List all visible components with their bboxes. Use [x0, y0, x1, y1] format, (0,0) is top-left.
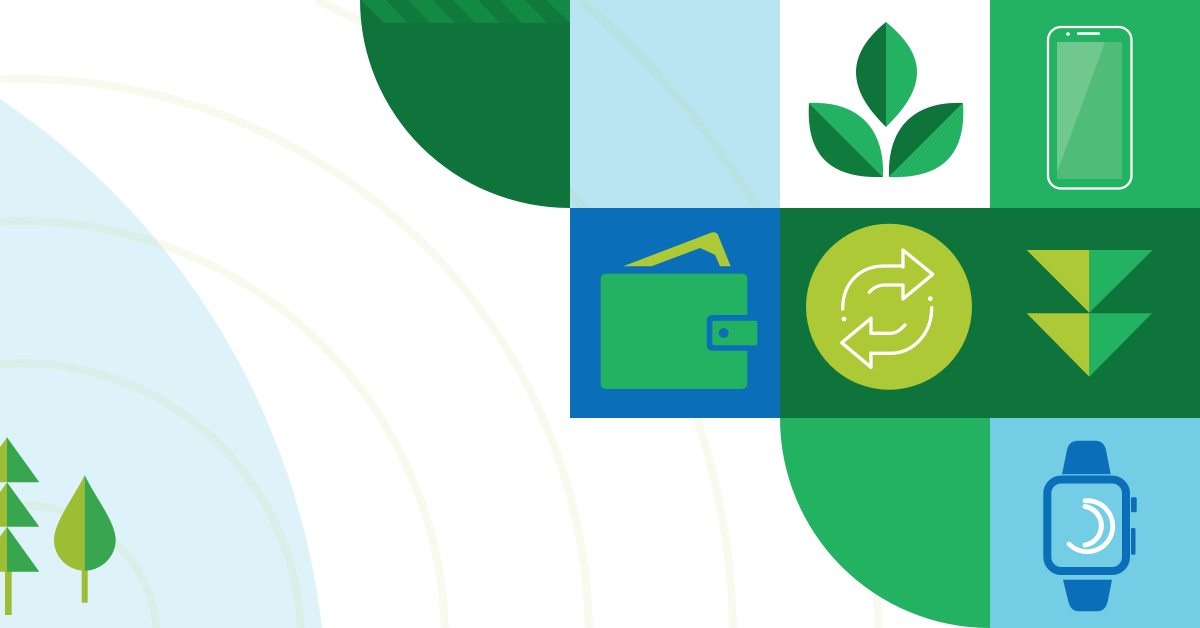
- panel: dark green quarter circle: [360, 0, 570, 208]
- panel: green phone cell: [990, 0, 1200, 208]
- striped band: [361, 0, 570, 23]
- panel: blue wallet cell: [570, 208, 780, 418]
- panel: dark green band: [780, 208, 1200, 418]
- icon: three leaves: [809, 22, 963, 177]
- icon: stacked triangles: [1027, 250, 1153, 377]
- panel: sky blue watch cell: [990, 418, 1200, 628]
- icon: lime circle with recycle arrows: [806, 224, 972, 390]
- panel: white leaf cell: [780, 0, 990, 208]
- icon: pine tree: [0, 437, 39, 615]
- icon: round tree: [54, 475, 116, 603]
- panel: green quarter circle: [780, 418, 990, 628]
- icon: smartphone: [1048, 27, 1132, 188]
- icon: wallet: [601, 232, 757, 389]
- panel: light blue square: [570, 0, 780, 208]
- concentric rings: [0, 0, 878, 628]
- light blue circle area: [0, 99, 322, 628]
- icon: smartwatch: [1047, 441, 1137, 611]
